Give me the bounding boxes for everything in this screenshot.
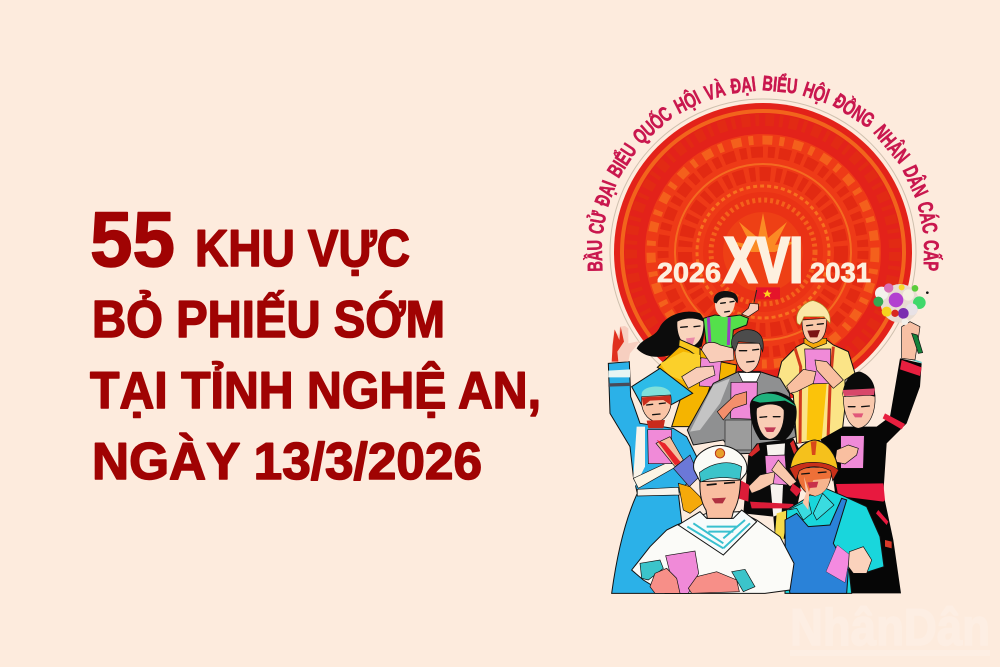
woman in black, raised arm bbox=[821, 322, 923, 593]
years and term number bbox=[657, 224, 871, 296]
circular slogan: HỘI bbox=[800, 76, 833, 108]
circular slogan: CẤP bbox=[919, 240, 944, 271]
drum centre star bbox=[726, 213, 800, 252]
years and term number: XVI bbox=[724, 224, 803, 296]
illustration: voters bbox=[608, 283, 929, 593]
circular slogan: QUỐC bbox=[628, 101, 677, 149]
circular slogan: ĐẠI bbox=[729, 72, 757, 98]
woman in blue with hat bbox=[608, 326, 703, 593]
circular slogan bbox=[582, 70, 944, 272]
circular slogan: CỬ bbox=[583, 208, 611, 236]
years and term number: 2026 bbox=[657, 257, 721, 288]
title: BỎ PHIẾU SỚM bbox=[92, 290, 445, 349]
circular slogan: ĐỒNG bbox=[829, 88, 879, 133]
facial features bbox=[647, 301, 869, 474]
man in grey suit bbox=[687, 330, 796, 454]
flag bbox=[754, 287, 780, 303]
circular slogan: NHÂN bbox=[869, 120, 915, 168]
sailor bbox=[632, 445, 794, 593]
circular slogan: CÁC bbox=[913, 199, 943, 236]
bronze drum emblem bbox=[610, 99, 916, 405]
circular slogan: BIỂU bbox=[761, 70, 799, 98]
circular slogan: HỘI bbox=[670, 85, 704, 118]
title bbox=[90, 195, 541, 491]
man with turban bbox=[777, 301, 855, 443]
title: 55 bbox=[90, 195, 175, 283]
circular slogan: DÂN bbox=[898, 161, 934, 201]
woman in yellow bbox=[637, 312, 737, 427]
construction worker bbox=[785, 440, 884, 593]
circular slogan: BIỂU bbox=[602, 139, 641, 182]
circular slogan: BẦU bbox=[582, 240, 607, 272]
circular slogan: VÀ bbox=[701, 76, 728, 105]
woman with green hat bbox=[738, 392, 803, 540]
bouquet bbox=[873, 283, 929, 325]
years and term number: 2031 bbox=[810, 257, 871, 288]
title: TẠI TỈNH NGHỆ AN, bbox=[90, 361, 541, 420]
child on shoulders bbox=[702, 291, 758, 363]
circular slogan: ĐẠI bbox=[590, 178, 621, 209]
title: KHU VỰC bbox=[195, 220, 410, 278]
title: NGÀY 13/3/2026 bbox=[92, 433, 482, 491]
